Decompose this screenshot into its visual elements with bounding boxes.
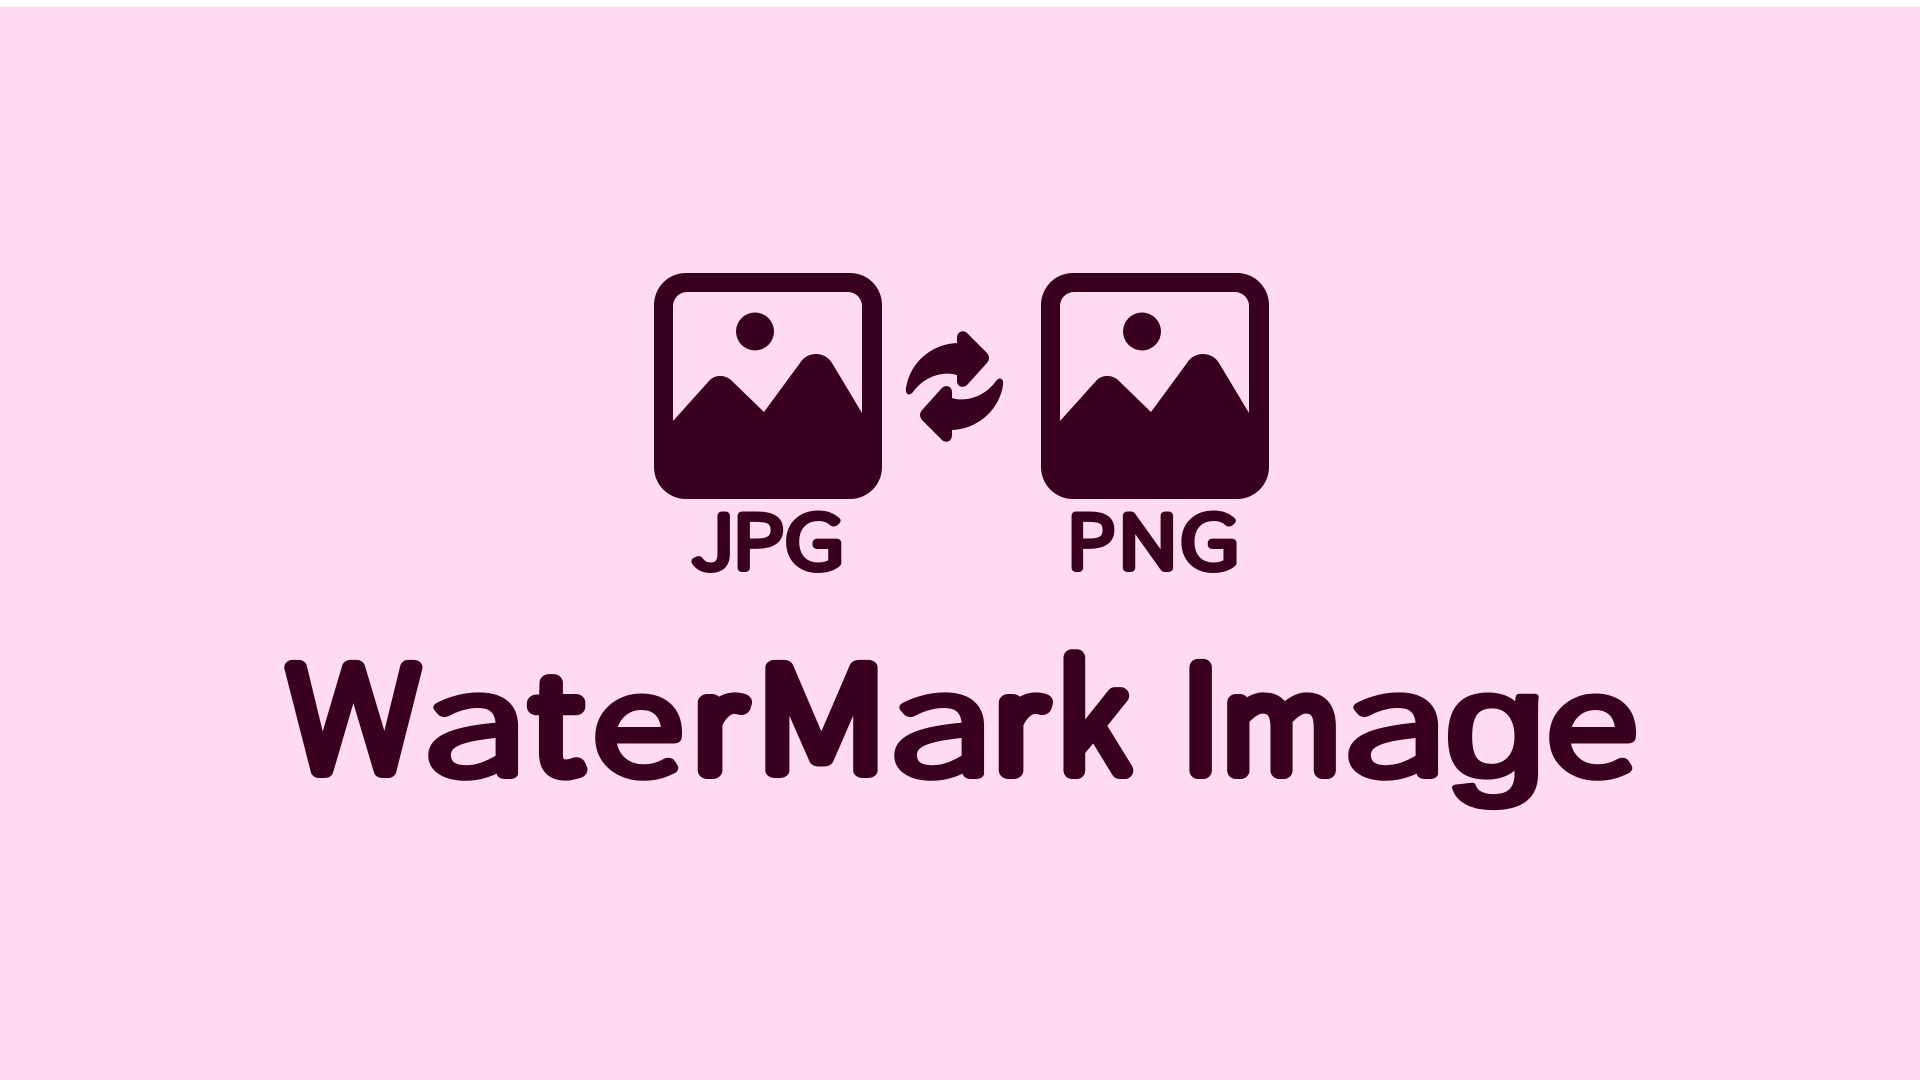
title: a	[889, 612, 994, 814]
title: g	[1444, 640, 1547, 808]
icon: JPG image	[654, 273, 882, 499]
title: e	[1547, 616, 1636, 813]
label: JPG: G	[786, 484, 844, 589]
title: a	[423, 612, 528, 814]
label: PNG: G	[1181, 484, 1239, 589]
title: a	[1343, 612, 1448, 814]
title: t	[532, 622, 580, 808]
icon: convert arrows	[906, 331, 1003, 442]
title: I	[1182, 606, 1219, 812]
title: k	[1057, 606, 1127, 812]
title: r	[692, 622, 743, 808]
label: JPG: J	[692, 484, 734, 589]
label: PNG: N	[1118, 484, 1178, 589]
icon: PNG image	[1041, 273, 1269, 499]
title: m	[1222, 622, 1340, 808]
title: r	[993, 622, 1044, 808]
title: W	[287, 606, 420, 812]
label: PNG: P	[1067, 484, 1114, 589]
title: e	[593, 616, 682, 813]
title: M	[756, 606, 887, 812]
label: JPG: P	[733, 484, 783, 589]
